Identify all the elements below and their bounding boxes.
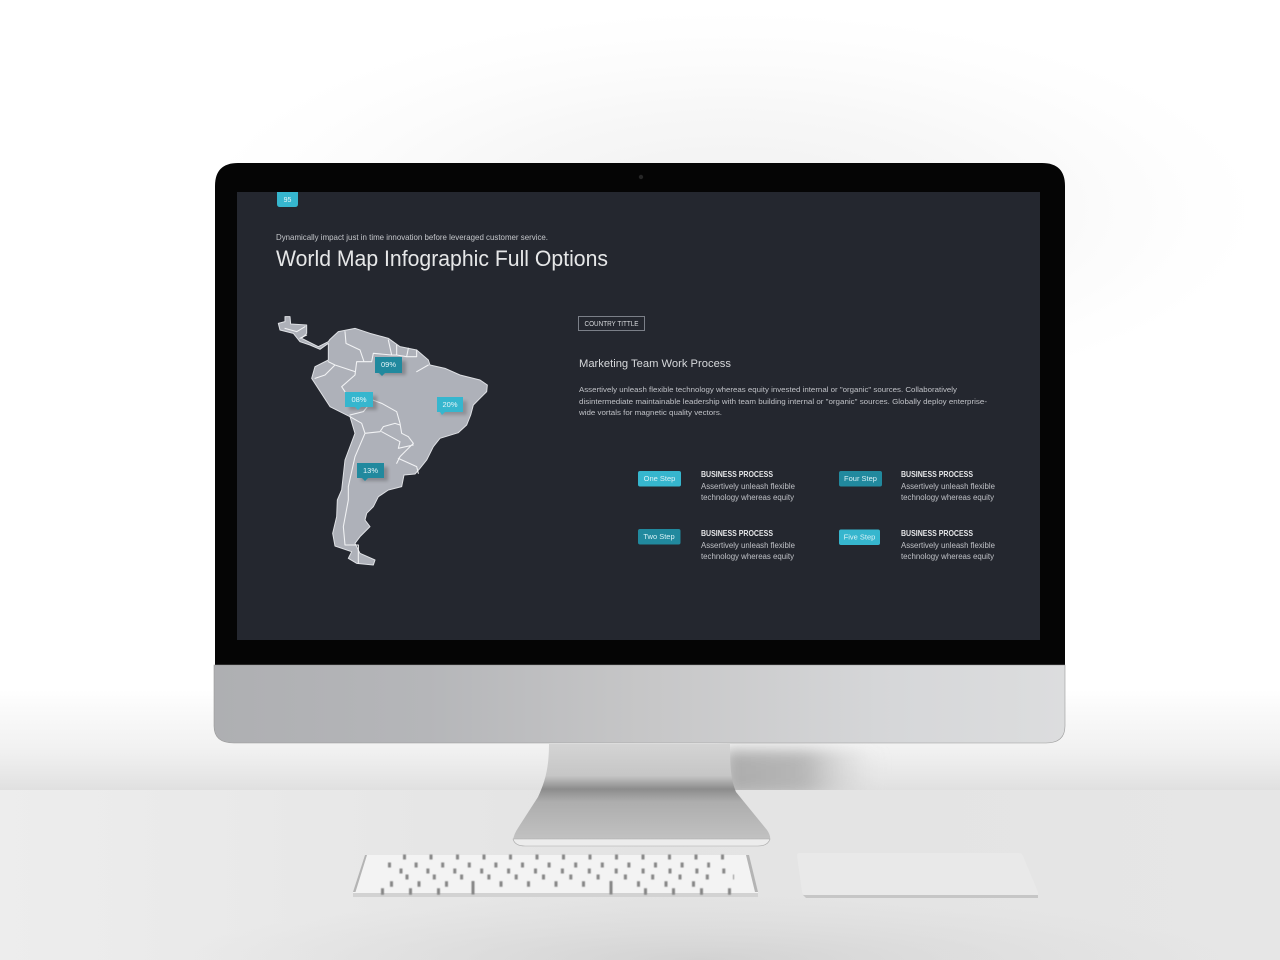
trackpad	[797, 853, 1038, 898]
step: One Step: One Step	[644, 474, 675, 483]
callout: 08%: 08%	[351, 395, 367, 404]
step: Four Step: technology whereas equity	[901, 493, 994, 502]
step: Five Step	[839, 529, 996, 561]
keyboard	[353, 855, 758, 897]
paragraph: Assertively unleash flexible technology whereas equity invested internal or "organic" sources. Collaboratively	[579, 385, 957, 394]
paragraph: wide vortals for magnetic quality vectors.	[578, 408, 722, 417]
country borders	[285, 327, 428, 563]
monitor stand	[513, 744, 770, 846]
step: Five Step: technology whereas equity	[901, 552, 994, 561]
map: South America	[278, 317, 487, 565]
country title tag: COUNTRY TITTLE	[584, 319, 638, 328]
subtitle: Dynamically impact just in time innovation before leveraged customer service.	[276, 233, 548, 242]
callout: 08%	[345, 392, 377, 410]
step: One Step: Assertively unleash flexible	[701, 482, 796, 491]
step: One Step: technology whereas equity	[701, 493, 794, 502]
step: Two Step: BUSINESS PROCESS	[701, 529, 774, 538]
callout: 09%: 09%	[381, 360, 396, 369]
screen panel	[237, 192, 1040, 640]
step: Two Step: Two Step	[643, 532, 675, 541]
step: Two Step: technology whereas equity	[701, 552, 794, 561]
step: Five Step: Five Step	[844, 532, 875, 542]
step: One Step: BUSINESS PROCESS	[701, 470, 774, 479]
step: Four Step: Assertively unleash flexible	[901, 482, 996, 491]
step: Five Step: Assertively unleash flexible	[901, 541, 996, 550]
callout: 13%	[357, 463, 388, 481]
step: Two Step	[638, 529, 796, 561]
callout: 09%	[375, 357, 406, 376]
step: Four Step	[839, 470, 996, 502]
paragraph: disintermediate maintainable leadership with team building internal or "organic" sources. Globally deploy enterprise-	[579, 397, 987, 406]
callout: 20%	[437, 397, 467, 415]
paragraph	[578, 385, 987, 417]
step: Two Step: Assertively unleash flexible	[701, 541, 796, 550]
step: One Step	[638, 470, 796, 502]
step: Five Step: BUSINESS PROCESS	[901, 529, 974, 538]
step: Four Step: Four Step	[844, 474, 877, 483]
monitor body	[214, 163, 1065, 743]
section heading: Marketing Team Work Process	[579, 358, 731, 370]
callout: 13%: 13%	[363, 466, 378, 475]
title: World Map Infographic Full Options	[276, 246, 608, 271]
callout: 20%: 20%	[442, 400, 458, 409]
step: Four Step: BUSINESS PROCESS	[901, 470, 974, 479]
country title tag	[578, 316, 644, 330]
page number tag: 95	[284, 197, 291, 204]
landmass	[278, 317, 487, 565]
page number tag	[277, 192, 298, 207]
